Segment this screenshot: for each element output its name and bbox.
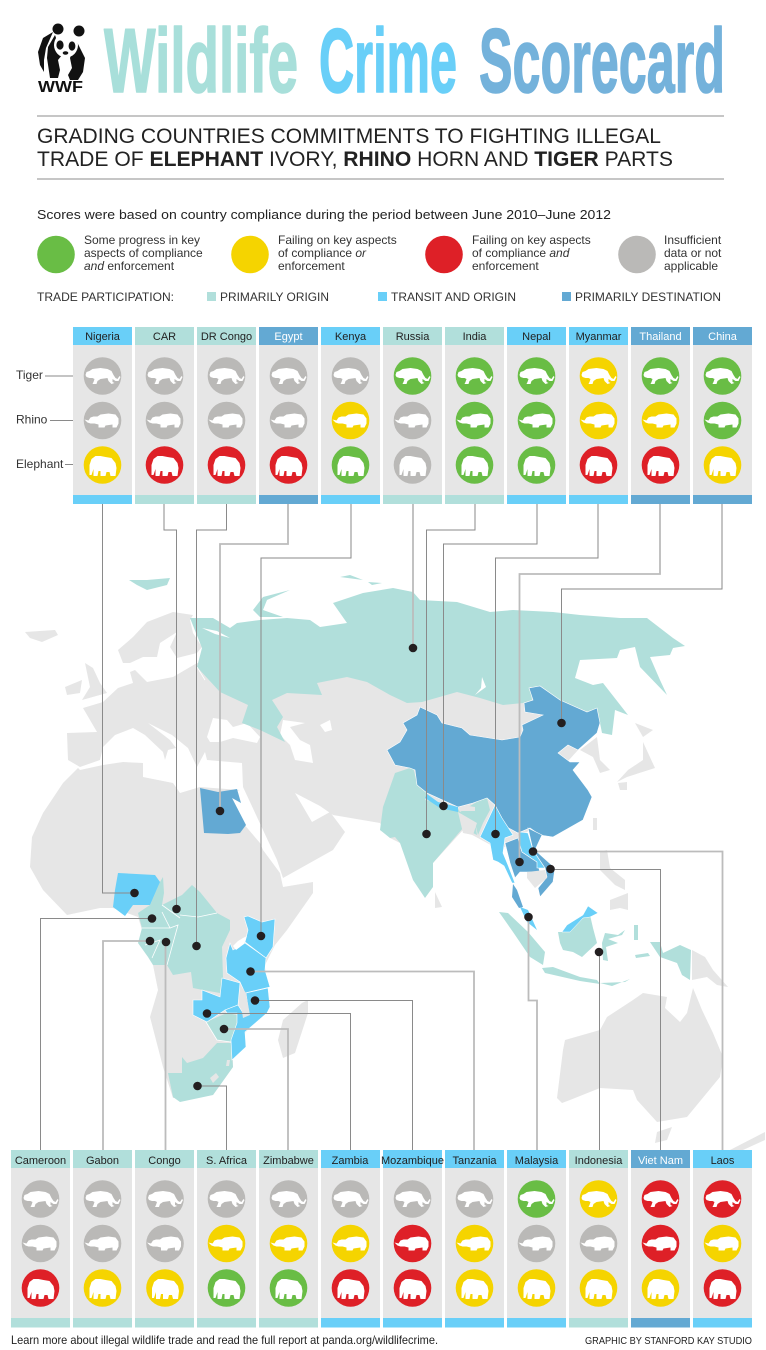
panel: Thailand: Thailand (639, 331, 682, 343)
legend: score colours (37, 233, 722, 273)
panel: Zimbabwe: Zimbabwe (263, 1155, 314, 1167)
panel: Nigeria (73, 327, 132, 504)
panel: India (445, 327, 504, 504)
panel: Russia (383, 327, 442, 504)
panel: Kenya (321, 327, 380, 504)
panel: Congo (135, 1150, 194, 1328)
footer: credit: GRAPHIC BY STANFORD KAY STUDIO (585, 1336, 752, 1347)
panel: Gabon (73, 1150, 132, 1328)
legend: score colours: Some progress in key (84, 233, 200, 247)
world map (25, 575, 765, 1150)
panel: Tanzania: Tanzania (452, 1155, 497, 1167)
legend: score colours: Insufficient (664, 233, 722, 247)
panel: India: India (463, 331, 487, 343)
panel: CAR (135, 327, 194, 504)
panel: S. Africa: S. Africa (206, 1155, 248, 1167)
panel: Mozambique (381, 1150, 444, 1328)
panel: China: China (708, 331, 738, 343)
scoring note: Scores were based on country compliance during the period between June 2010–June 2012 (37, 207, 611, 222)
panel: Indonesia: Indonesia (575, 1155, 623, 1167)
legend: trade participation: PRIMARILY ORIGIN (220, 290, 329, 304)
panel: S. Africa (197, 1150, 256, 1328)
country location dots (130, 644, 603, 1090)
connector lines (40, 376, 722, 1150)
panel: Egypt (259, 327, 318, 504)
panel: Laos (693, 1150, 752, 1328)
panel: DR Congo (197, 327, 256, 504)
panel: Russia: Russia (396, 331, 430, 343)
panel: Cameroon (11, 1150, 70, 1328)
panel: Myanmar: Myanmar (576, 331, 622, 343)
species row labels: Elephant (16, 457, 64, 471)
title (104, 11, 725, 112)
legend: score colours: applicable (664, 259, 718, 273)
panel: Nepal (507, 327, 566, 504)
panel: Zambia: Zambia (332, 1155, 369, 1167)
species row labels: Tiger (16, 368, 43, 382)
panel: Tanzania (445, 1150, 504, 1328)
panel: Indonesia (569, 1150, 628, 1328)
species row labels (16, 368, 64, 471)
legend: trade participation (37, 290, 721, 304)
panel: Viet Nam (631, 1150, 690, 1328)
legend: score colours: aspects of compliance (84, 246, 203, 260)
subtitle: GRADING COUNTRIES COMMITMENTS TO FIGHTING ILLEGAL (37, 125, 661, 148)
panel: Kenya: Kenya (335, 331, 367, 343)
panel: DR Congo: DR Congo (201, 331, 252, 343)
subtitle (37, 125, 673, 171)
panel: Laos: Laos (711, 1155, 735, 1167)
legend: score colours: Failing on key aspects (278, 233, 397, 247)
footer: report note: Learn more about illegal wildlife trade and read the full report at panda.org/wildlifecrime. (11, 1333, 438, 1347)
panel: Mozambique: Mozambique (381, 1155, 444, 1167)
panel: Viet Nam: Viet Nam (638, 1155, 683, 1167)
panel: Nigeria: Nigeria (85, 331, 121, 343)
legend: trade participation: TRANSIT AND ORIGIN (391, 290, 516, 304)
legend: score colours: and enforcement (84, 259, 175, 273)
panel: Zimbabwe (259, 1150, 318, 1328)
WWF panda logo: WWF (38, 79, 83, 96)
panel: Nepal: Nepal (522, 331, 551, 343)
legend: score colours: of compliance or (278, 246, 367, 260)
panel: Myanmar (569, 327, 628, 504)
panel: CAR: CAR (153, 331, 176, 343)
title: Wildlife (104, 11, 298, 112)
WWF panda logo (38, 24, 85, 96)
panel: Cameroon: Cameroon (15, 1155, 66, 1167)
legend: score colours: Failing on key aspects (472, 233, 591, 247)
panel: Malaysia: Malaysia (515, 1155, 559, 1167)
legend: score colours: data or not (664, 246, 722, 260)
title: Crime (319, 11, 457, 112)
species row labels: Rhino (16, 412, 48, 426)
panel: Zambia (321, 1150, 380, 1328)
panel: Thailand (631, 327, 690, 504)
legend: score colours: of compliance and (472, 246, 570, 260)
legend: trade participation: TRADE PARTICIPATION: (37, 290, 174, 304)
legend: score colours: enforcement (472, 259, 539, 273)
panel: Congo: Congo (148, 1155, 181, 1167)
legend: trade participation: PRIMARILY DESTINATION (575, 290, 721, 304)
panel: Gabon: Gabon (86, 1155, 119, 1167)
legend: score colours: enforcement (278, 259, 345, 273)
panel: Egypt: Egypt (274, 331, 303, 343)
subtitle: TRADE OF ELEPHANT IVORY, RHINO HORN AND TIGER PARTS (37, 148, 673, 171)
panel: China (693, 327, 752, 504)
panel: Malaysia (507, 1150, 566, 1328)
